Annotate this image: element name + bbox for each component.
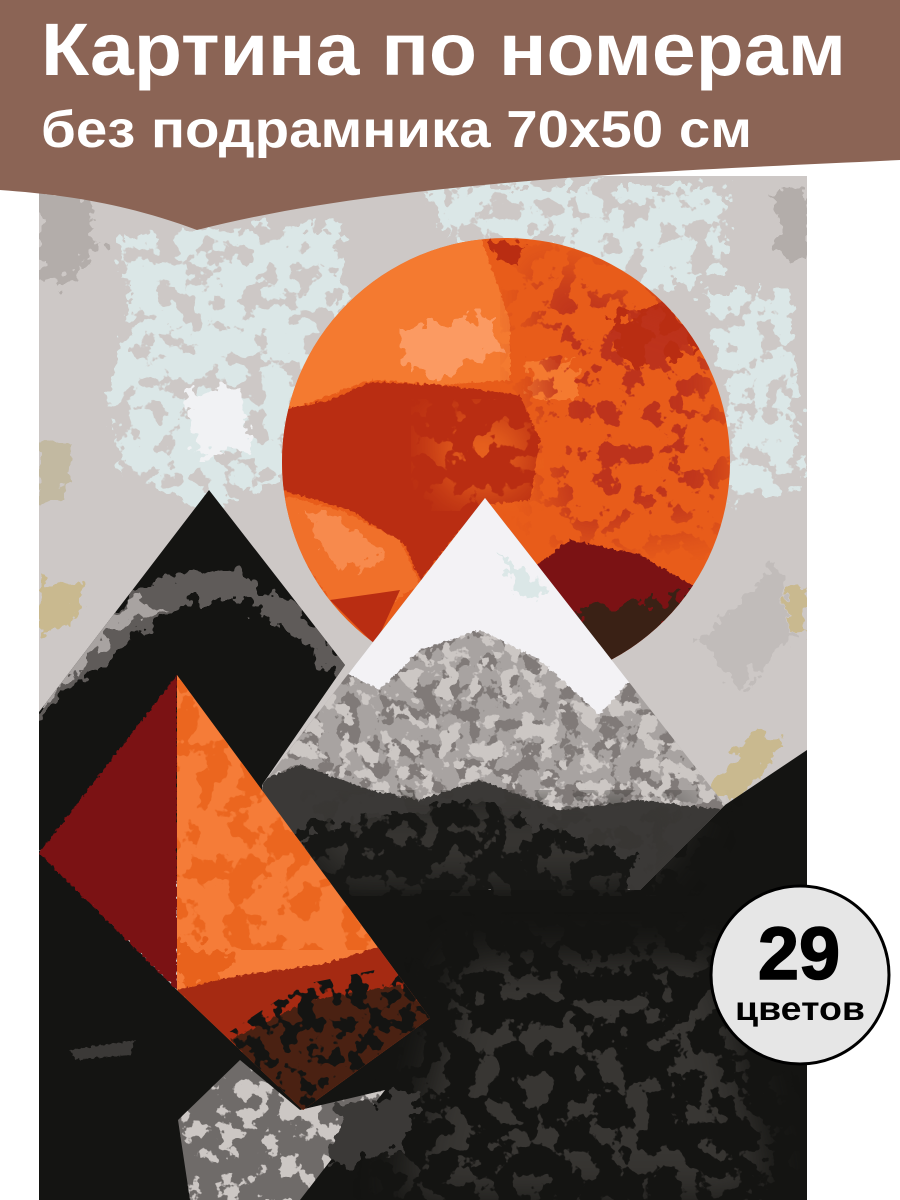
sun [280,236,735,690]
sky: white highlights [185,385,250,455]
foothill dark patch [330,1090,420,1170]
badge circle [711,886,889,1064]
left black mountain [39,490,345,881]
number: 29 [758,912,840,995]
sun dark red blotches [490,240,700,370]
black flecks [220,960,440,1120]
burnt lower band [177,945,435,1115]
mist band [39,570,345,720]
orange pyramid right face [177,670,440,1120]
noise fill [417,399,537,511]
sun light orange upper-left [280,236,510,410]
sun dark red band [280,382,540,580]
noise fill [220,960,440,1120]
subtitle: без подрамника 70х50 см [41,101,752,159]
sun orange veins in band [417,399,537,511]
sun lower-right dark maroon [537,538,693,660]
red pyramid left face [39,675,177,990]
grey foothill at bottom [175,1055,390,1200]
sky: grey flecks over clouds [103,176,802,511]
sky: pale flecks lower right [700,560,790,690]
left specks [70,1040,135,1060]
noise fill [300,790,800,1200]
foothill base [175,1055,390,1200]
orange base [177,670,437,1115]
grey texture [262,624,725,810]
lower dark texture [70,790,800,1200]
pale flecks on snow [500,550,545,600]
black mountain body [39,490,345,881]
sun red noise [508,253,730,551]
noise fill [508,253,730,551]
sun highlight [400,315,500,378]
dark lower slope [262,765,725,890]
sky: pale blue clouds [105,185,800,510]
painting background sky [39,176,807,990]
header banner [0,0,900,230]
title: Картина по номерам [41,8,846,91]
sky: darker grey and ochre edge patches [39,190,807,800]
sun lower-left orange [284,496,418,602]
deep orange texture [177,680,397,950]
central mountain [260,490,730,900]
bottom black ground [39,850,276,1200]
foothill light flecks [180,1068,385,1200]
painting [39,176,807,1200]
dark grey brush patches [300,790,800,1200]
badge: 29 colours [711,886,889,1064]
mountain grey body [260,490,730,890]
label: цветов [735,990,865,1027]
mist pale edge [39,600,170,710]
snow cap [340,490,630,715]
sun base orange [280,236,732,688]
